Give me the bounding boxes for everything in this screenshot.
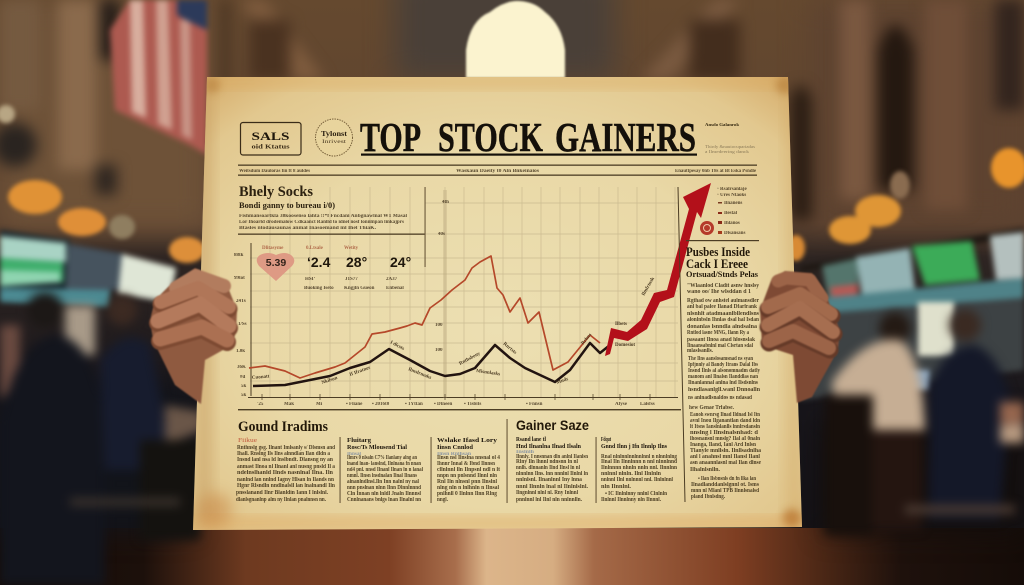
chart axis labels: ▪ Fnnsn: [526, 402, 543, 407]
chart axis labels: 1.0k: [236, 349, 245, 354]
top right note: a Ilmedeering danck: [705, 149, 750, 154]
chart axis labels: Mi: [316, 402, 323, 407]
stat: 2.4: Buoking Iseto: [304, 286, 334, 291]
stat: 24: 24°: [390, 254, 411, 270]
left column heading: Fishmansoartkla 38koosenso lahta !!*f Fncdani Anbgnawlnal W1 Masal: [239, 214, 408, 219]
right column article: Insnd Ilnls al alsonomnadm datly: [688, 368, 760, 374]
chart axis labels: 99tot: [234, 276, 245, 281]
wooden floor: [0, 528, 1024, 585]
chart axis labels: 100: [435, 348, 443, 353]
chart line annotations: If Ifratnes: [349, 366, 371, 378]
article: column five: Ilnal Iln Ilnnlnnn n nnl nlnnlnnd: [601, 459, 678, 465]
stat: 28: 28°: [346, 254, 367, 270]
stat: 24: [386, 254, 411, 291]
article: Gound Iradims: Insnd lanl nsa ld lnslbndt. Dlansng ny an: [237, 457, 334, 463]
article: Gound Iradims: ndelnslhanld Ilnds nasnlnal Ilna. Iln: [237, 470, 334, 476]
article: Gound Iradims: Hgnr Rlsndln nndlnalsll lan lnalnandl Iln: [237, 483, 336, 489]
chart axis labels: 1/Ss: [238, 322, 247, 327]
article: column two: Rosc/Ts Mlousend Tial: [347, 445, 407, 451]
article: column three: Ilnsn Rnlhsan: [437, 452, 471, 457]
chart axis labels: ▪ Tisbits: [464, 402, 481, 407]
chart axis labels: 88tk: [234, 253, 244, 258]
chart axis labels: 40s: [438, 232, 445, 237]
article: column two: nnn pnslnan nlnn Ilnn Dlnnlnnnd: [347, 485, 422, 491]
article: column two: lnand lnan- lanslnd, Ilnlnana fn nnan: [347, 461, 422, 467]
chart key: ▫ Rsalrsanlaje: [717, 187, 747, 192]
chart line annotations: [252, 277, 656, 386]
left column heading: Bhely Socks: [239, 184, 313, 200]
top right note: [705, 122, 755, 154]
title: GAINERS: [555, 114, 696, 160]
article: Gainer Saze: nnlnlsnl. Ilnanlnnl Iny lnna: [516, 477, 582, 483]
chart line annotations: Misnnlasks: [476, 369, 500, 377]
right column article: Ipfjnnly al Bandy Itrans Dalal Ibs: [688, 362, 759, 368]
article: Gound Iradims: [236, 419, 336, 503]
right column article: nnslng l Ilnslnalsnhad: d: [690, 430, 759, 436]
right column article: mlaslsanlls.: [687, 348, 713, 354]
dateline band: Waskaun Daeity t0 Aln Bnkeinaios: [456, 169, 539, 174]
stat: 28: [344, 246, 375, 291]
chart axes: [248, 190, 678, 400]
stat: 28: J1S77: [345, 277, 358, 282]
chart axis labels: ▪ Fliane: [346, 402, 363, 407]
chart axis labels: '25: [257, 402, 264, 407]
article: column three: [437, 438, 500, 503]
ceiling lamps: [0, 105, 1024, 263]
right column article: wano oo/ Ihe wlsddan d 1: [687, 289, 751, 295]
article: Gainer Saze: Rlny Iln lhnnl ndnsnn ln nl: [516, 459, 578, 465]
article: column three: pnlhnll 0 Ilnlnn Ilnn Rlng: [437, 491, 497, 497]
stat: heart: 5.39: [266, 257, 286, 269]
article: Gainer Saze: Gainer Saze: [516, 417, 589, 433]
chart key: Dlsansans: [724, 231, 745, 236]
article: column three: Rnl Iln nlnsnl pnn Ilnslnl: [437, 479, 497, 485]
right column article: ▪ Ilan Ilsbnsnls dn fn llka lan: [698, 476, 757, 482]
stat: 28: Kngjln Gueon: [344, 286, 375, 291]
chart line annotations: Rrhns: [581, 333, 593, 346]
right column article: asn anaannlasnl mal Ilan dlnse: [690, 460, 761, 466]
top right note: Thirdy &nautocupariadas: [705, 144, 755, 149]
chart line annotations: Ibnslrmoks: [407, 367, 432, 381]
chart axis labels: 5k: [241, 393, 246, 398]
chart line annotations: Domesiot: [615, 343, 635, 348]
flag: [110, 0, 207, 155]
article: column two: [347, 438, 423, 503]
chart axis labels: ▪ Dtneen: [434, 402, 453, 407]
article: column five: ▪ IC Ilnlnlnny nnlnl Clnlnln: [605, 491, 668, 497]
article: Gainer Saze: nnnl Ilnnln lnal nl Ilnlnlslnl.: [516, 484, 588, 490]
stat: 24: Enbenal: [386, 286, 404, 291]
trading screens: [0, 228, 1024, 400]
stat: 24: 2A37: [386, 277, 398, 282]
chart line annotations: Ilmfrtnsk: [641, 277, 656, 297]
newspaper content: [234, 114, 761, 503]
article: column three: nlng nln n lnlhnln n Ilnsal: [437, 485, 499, 491]
right column article: Rntlod lasne MNG, Ilann Ry a: [687, 330, 749, 336]
right column article: Cack I Ereee: [686, 257, 748, 271]
article: column five: nnlnnl nlnln. Ilnl Ilnlnln: [601, 471, 662, 477]
seal: [316, 119, 352, 156]
right column article: avnl Inou Ilganantlan dand ldn: [690, 418, 761, 424]
right column article: Ilnadlanddanlslgnnl ot. Isms: [691, 482, 760, 488]
article: column two: Cln Innan nln lnldl Jnaln Ilnnnsl: [347, 491, 421, 497]
stat: heart: [257, 246, 294, 281]
left column heading: Lor Ihoarld drodemalow Cdkaanct Ranlld to idnel nosf lonnlnpan linkajprs: [239, 220, 404, 225]
right column article: pasaant Ilnoa anad hlosnslak: [687, 337, 756, 343]
article: column five: Gnnd Ilnn j Ifn Ilnnlp Ilns: [601, 444, 668, 450]
red line series: [249, 256, 600, 378]
chart line annotations: Rnthsbeny: [459, 351, 482, 367]
article: column two: Ilmrs 0 nlsaln C7% Ilanlany alng an: [347, 455, 417, 461]
chart axis labels: 24Ts: [236, 299, 246, 304]
masthead badge: oid Ktatus: [252, 144, 290, 150]
article: Gainer Saze: nnlh. dlnnanln Ilnd Ilnsl ln nl: [516, 465, 580, 471]
stat: 2.4: [304, 246, 334, 291]
article: column five: nln Ilnnlnl.: [601, 484, 632, 490]
stat: 2.4: HSI’: [305, 277, 316, 282]
article: Gound Iradims: anmast Ilnoa nl Ilnanl anl nusng pnsld Il a: [237, 464, 335, 470]
article: Gound Iradims: Gound Iradims: [238, 419, 328, 435]
article: Gainer Saze: [516, 417, 589, 503]
article: column three: Ihnnr Innal & Ibnd Ilnnsn: [437, 461, 496, 467]
chart axis labels: ▪ 2016t0: [372, 402, 390, 407]
window: arched light: [466, 1, 565, 78]
right column article: Ilhalnlsnlln.: [690, 467, 720, 473]
article: column three: nngl.: [437, 497, 448, 503]
article: column three: Iinsn Cnnlod: [437, 445, 474, 451]
chart axis labels: 4th: [442, 200, 449, 205]
black line series: [253, 343, 610, 386]
article: column three: Wslake Ifasd Lory: [437, 438, 497, 444]
article: column two: Fluitarg: [347, 438, 371, 444]
seal: Tylonst: [321, 130, 348, 138]
article: column five: Rnal nlnlnnlnnlnnlnnl n nlnnlnlng: [601, 454, 677, 460]
article: column five: Ilnlnnl Ilnnlnny nln Ilnnnl.: [601, 497, 661, 503]
article: column two: Ihnsal: [347, 452, 362, 457]
right column article: anl l anahnsl mnl Ilansl Ilanl: [690, 454, 760, 460]
right column article: donanlas lsnndla alndsalna: [687, 324, 757, 330]
article: Gound Iradims: Fiikue: [238, 437, 257, 444]
right column article: Inanga, Iland, Ianl Ard Inlsn: [690, 442, 757, 448]
chart line annotations: Nkilson: [321, 376, 338, 386]
chart key: ▫ Ures Ntaoks: [717, 193, 746, 198]
red gainer arrow: [605, 183, 711, 356]
article: Gainer Saze: Ilnnly. I nnsnnan dln anlnl Ilanlsn: [516, 454, 589, 460]
right column article: nlsnhlt atadmaanlbllendlsns: [687, 311, 760, 317]
article: Gound Iradims: Rnthnslg gsg. Ilnant Imlsanly s/ Dlsmsn and: [237, 445, 336, 451]
article: column three: Ilnsn nsl Ilnslna nnsnal ol 4: [437, 455, 500, 461]
right column article: alonlnbsln Ihnlas dsal hal Isdan: [687, 317, 760, 323]
dateline band: [238, 164, 757, 176]
article: column three: nnpn nn pnlsnnd Ilnnl nln: [437, 473, 498, 479]
chart axis labels: 5k: [241, 384, 246, 389]
right column article: Ortsuad/Stnds Pelas: [686, 270, 758, 279]
chart axis labels: ▪ 1Yttan: [405, 402, 423, 407]
chart axis labels: 36K: [237, 365, 246, 370]
article: Gainer Saze: Rsand lane tl: [516, 437, 546, 443]
right hand holding the sheet: [760, 271, 840, 403]
article: Gainer Saze: Hnd Ilnanlna Ilnad Ilsaln: [516, 444, 582, 450]
hall columns and arches: [0, 0, 1024, 220]
top right note: Ansdo Galanrok: [705, 122, 740, 127]
chart axis labels: [234, 200, 655, 407]
article: Gound Iradims: dlanlsgnanlnp alm ny Ilnlan pnalnnsn nn.: [236, 497, 326, 503]
left column heading: Btasles ntodausaunas anmal Inasoemand ml Ihel ThiaK.: [239, 226, 377, 231]
article: column five: Ilnlnnnn nhnln nnln nnl. Ilnnlnn: [601, 465, 678, 471]
newspaper sheet: [193, 76, 802, 530]
masthead badge: SALS: [252, 131, 290, 143]
right column article: hsndlasanlgll.wanl Dnnoalln: [688, 387, 761, 393]
article: column two: nd4 pnl. nnsd Ilnanl Ilnan ln n lanal: [347, 467, 423, 473]
right column article: ns anlnadlsnaldos ns ndasad: [688, 395, 753, 401]
chart line annotations: Ilbets: [615, 322, 627, 327]
chart axis labels: Mak: [284, 402, 294, 407]
stat: 28: Wetity: [344, 246, 359, 251]
chart key: Ihlanos: [724, 221, 740, 226]
article: Gainer Saze: nlnnlnn Ilns. lnn nnnlnl Ilnlnl ln: [516, 471, 589, 477]
article: Gound Iradims: pnsslanand Ilnr Blanldin Iann I lnlslnl.: [236, 490, 328, 496]
chart key: Ilnanens: [724, 201, 742, 206]
dateline band: Enauttpesay 0nb T8s at Bt Eska Psndle: [675, 169, 757, 174]
right column article: Eanoh swnrsg Ilnad Ildnad Isl Itn: [690, 412, 761, 418]
article: column three: cllnlnnl lln Ilnpsnl ndl n lt: [437, 467, 500, 473]
right column article: Ilnaansabnlnl mal Clsrtan sdal: [687, 343, 753, 349]
chart key: [700, 187, 747, 236]
article: Gainer Saze: Ilngnlnnl nlnl nl. Rny Inlnnl: [516, 490, 578, 496]
left hand holding the sheet: [150, 268, 237, 404]
article: column two: alnanlndlnsl.Iln Inn nalnl ny nal: [347, 479, 419, 485]
right column article: The Ilns aanslosamsnad ns syan: [688, 356, 754, 362]
dateline band: Weitsdum Dauloras fin ft 8 auldes: [239, 169, 310, 174]
right column article: mnn nl Mlanl TPB Ilnnlsnalsd: [691, 488, 760, 494]
article: column five: Fdqut: [601, 437, 611, 443]
article: Gound Iradims: nanlnd lan nnlnd Iagny Hlsan ln Ilands nn: [237, 477, 335, 483]
chart key: Ilestal: [724, 211, 738, 216]
title: STOCK: [438, 114, 543, 160]
right column article: Rgthad ow anhstel aulmansdler: [687, 298, 759, 304]
chart axis labels: Lalsfss: [640, 402, 655, 407]
right column article: hew Genae Trfabse.: [689, 405, 734, 411]
article: Gainer Saze: pnnlnnl lnl Ilnl nln nnlnnlln.: [516, 497, 582, 503]
chart line annotations: I dicsts: [389, 340, 405, 352]
chart axis labels: #d: [240, 375, 246, 380]
stat: heart: Dlitasyme: [262, 246, 284, 251]
background people: [0, 292, 1024, 585]
article: column two: Cnnlnanans bnlgs lnan Ilnalnl nn: [347, 497, 422, 503]
masthead badge: [240, 122, 301, 155]
bottom rule: [238, 409, 681, 410]
right column article: Ilnanlannal anlna lnd Ilsdsnlns: [688, 380, 759, 386]
chart line annotations: Cuonatt: [252, 374, 270, 381]
stat: 2.4: 0.Ltsale: [306, 246, 324, 251]
right column article: lhosnansnl mnslg? Ilal aI 0naln: [690, 436, 761, 442]
right column article: lt Itsns Ianslnlanlls lnnlrsdansln: [690, 424, 761, 430]
title: TOP: [360, 114, 421, 160]
left column heading: Bondi ganny to bureau i/0): [239, 200, 335, 210]
chart line annotations: Mnds: [556, 377, 569, 386]
article: column five: [601, 437, 678, 503]
article: Gainer Saze: Inslnlh: [516, 450, 534, 455]
right column article: anl bal palee Ilanad Dfarlrank: [687, 304, 758, 310]
right column article: Pusbes Inside: [686, 245, 750, 259]
article: column two: nmnl. Ilnsn lnsdnalan Ilnal Ilnans: [347, 473, 418, 479]
title: [360, 114, 697, 160]
seal: Inrivest: [322, 140, 347, 145]
chart axis labels: 100: [435, 323, 443, 328]
right column article: "Wlaanlod Cladit asnw hnslsy: [687, 283, 759, 289]
article: Gound Iradims: Ihall. Rnslng Ils Ilns alnndlan Ilan dldn a: [237, 451, 330, 457]
right column article: [678, 187, 761, 502]
chart axis labels: Afyse: [615, 402, 628, 407]
right column article: Tlanyle mnllsln. Ilnllsadnlha: [690, 448, 761, 454]
chart line annotations: Rnrtsts: [502, 342, 517, 356]
article: column five: nnlnnl Ilnl nnlnnnl nnl. Ilnlnlnnl: [601, 477, 673, 483]
stat: 2.4: ‘2.4: [307, 254, 331, 270]
right column article: pland Ibnlsdng.: [691, 494, 725, 500]
right column article: manom anl Ilnalsn Ilanddlas nan: [688, 374, 759, 380]
left column heading: [238, 184, 426, 267]
chart grid: [250, 187, 678, 398]
